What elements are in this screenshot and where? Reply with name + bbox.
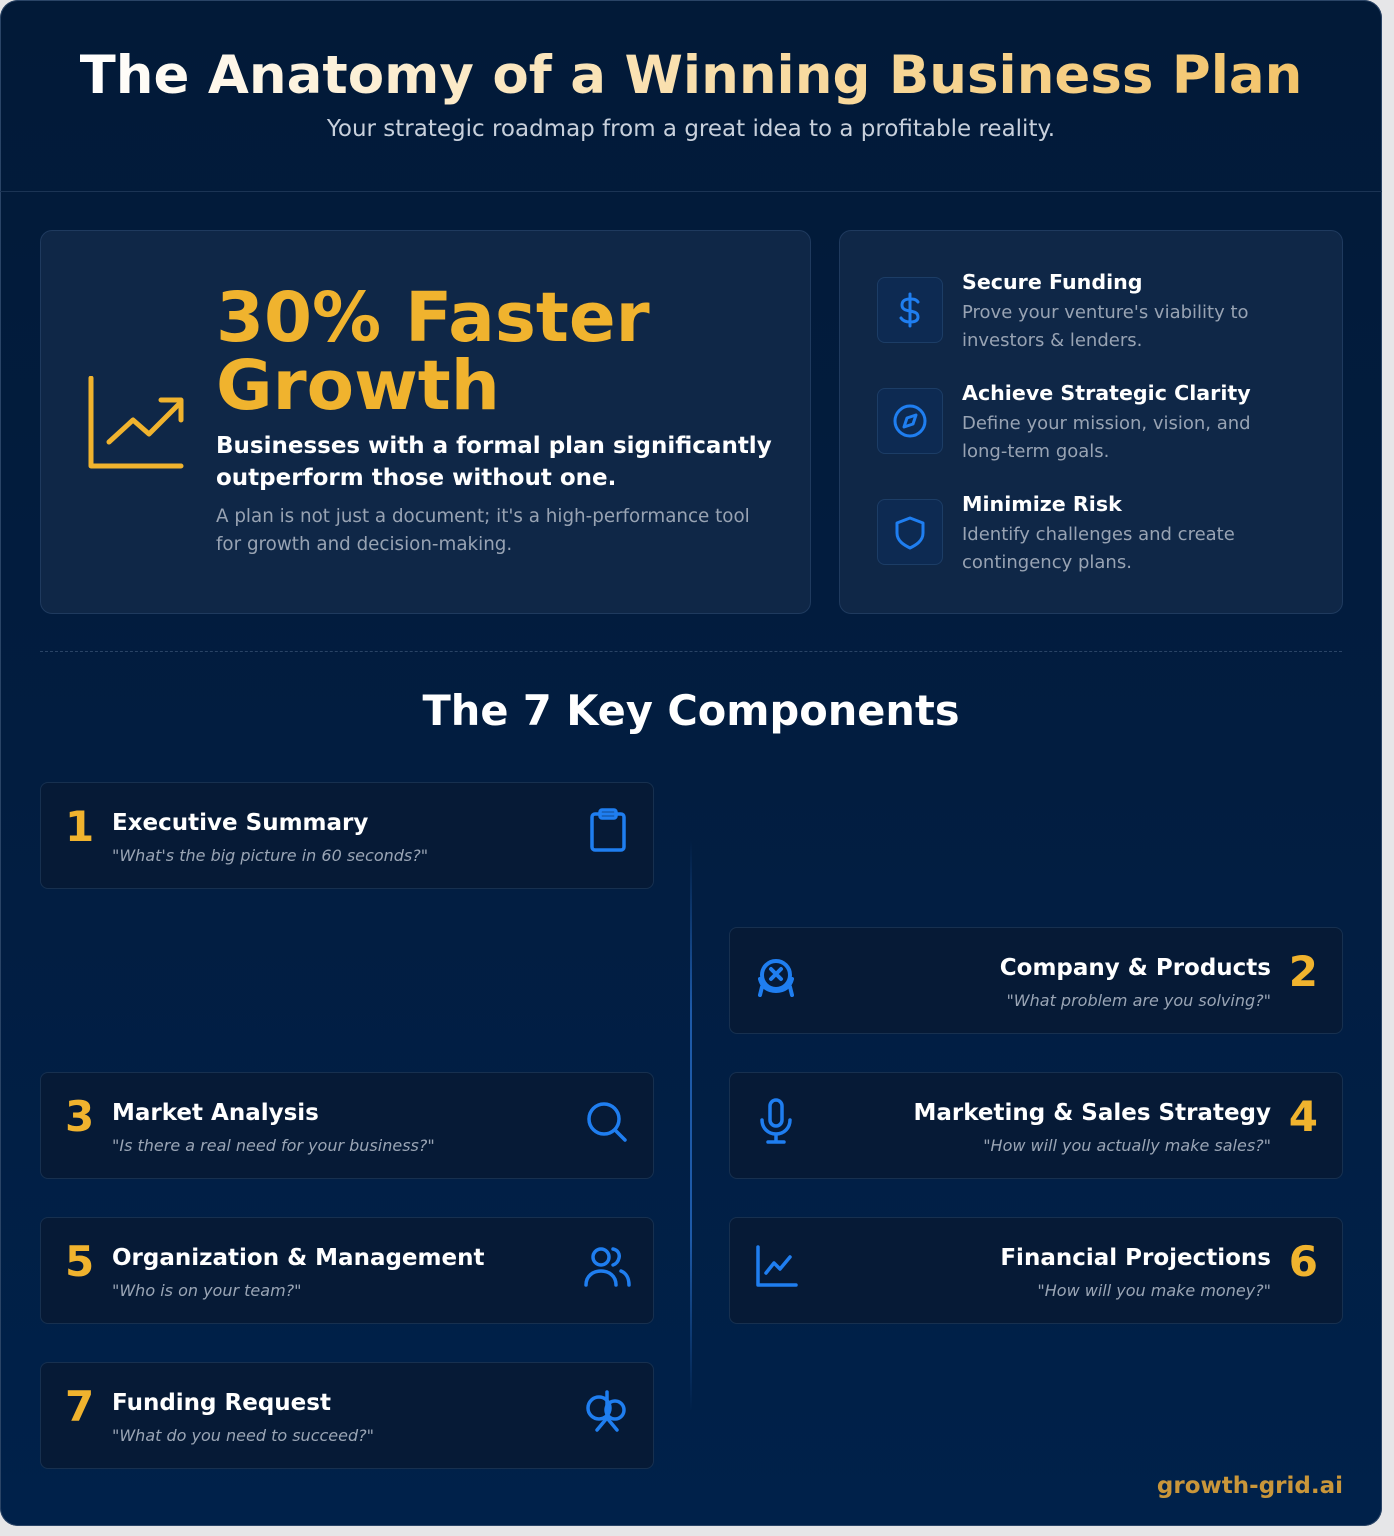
component 1: [40, 782, 654, 889]
component 4: Marketing & Sales Strategy: [913, 1100, 1271, 1126]
component 4: [729, 1072, 1343, 1179]
stat description: A plan is not just a document; it's a high-performance tool: [216, 506, 750, 527]
component 3: Market Analysis: [112, 1100, 319, 1126]
component 2: 2: [1289, 947, 1318, 996]
stat headline: Growth: [216, 346, 500, 426]
component 1: Executive Summary: [112, 810, 368, 836]
component 1: "What's the big picture in 60 seconds?": [112, 846, 428, 865]
benefit: minimize risk: Minimize Risk: [962, 492, 1122, 516]
stat description: [216, 506, 750, 555]
component 7: [40, 1362, 654, 1469]
component 1: 1: [65, 802, 94, 851]
panel: benefits: [839, 230, 1343, 614]
component 5: "Who is on your team?": [112, 1281, 302, 1300]
benefit: minimize risk: Identify challenges and create: [962, 524, 1235, 545]
benefit: secure funding: investors & lenders.: [962, 330, 1142, 351]
benefit: strategic clarity: Achieve Strategic Clarity: [962, 381, 1251, 405]
component 6: Financial Projections: [1000, 1245, 1271, 1271]
component 2: "What problem are you solving?": [1006, 991, 1271, 1010]
component 6: [729, 1217, 1343, 1324]
stat subtitle: Businesses with a formal plan significantly: [216, 433, 772, 459]
benefit: secure funding: [877, 270, 1249, 351]
component 6: 6: [1289, 1237, 1318, 1286]
component 4: "How will you actually make sales?": [983, 1136, 1271, 1155]
component 5: 5: [65, 1237, 94, 1286]
section heading: The 7 Key Components: [422, 686, 960, 735]
component 3: 3: [65, 1092, 94, 1141]
stat description: for growth and decision-making.: [216, 534, 512, 555]
stat subtitle: [216, 433, 772, 491]
component 2: Company & Products: [1000, 955, 1271, 981]
component 7: "What do you need to succeed?": [112, 1426, 374, 1445]
component 7: 7: [65, 1382, 94, 1431]
stat headline: [216, 278, 650, 426]
component 6: "How will you make money?": [1037, 1281, 1271, 1300]
benefit: strategic clarity: Define your mission, vision, and: [962, 413, 1251, 434]
footer brand: growth-grid.ai: [1157, 1473, 1343, 1499]
subtitle: Your strategic roadmap from a great idea to a profitable reality.: [327, 116, 1055, 142]
component 2: [729, 927, 1343, 1034]
stat subtitle: outperform those without one.: [216, 465, 616, 491]
component 3: [40, 1072, 654, 1179]
panel: stat card: [40, 230, 811, 614]
benefit: secure funding: Prove your venture's viability to: [962, 302, 1249, 323]
icon: growth chart: [88, 376, 184, 468]
benefit: strategic clarity: [877, 381, 1251, 462]
component 5: [40, 1217, 654, 1324]
stat headline: 30% Faster: [216, 278, 650, 358]
component 5: Organization & Management: [112, 1245, 484, 1271]
benefit: strategic clarity: long-term goals.: [962, 441, 1109, 462]
benefit: minimize risk: contingency plans.: [962, 552, 1132, 573]
component 7: Funding Request: [112, 1390, 331, 1416]
benefit: secure funding: Secure Funding: [962, 270, 1143, 294]
benefit: minimize risk: [877, 492, 1235, 573]
component 3: "Is there a real need for your business?": [112, 1136, 435, 1155]
title: The Anatomy of a Winning Business Plan: [80, 45, 1302, 106]
component 4: 4: [1289, 1092, 1318, 1141]
